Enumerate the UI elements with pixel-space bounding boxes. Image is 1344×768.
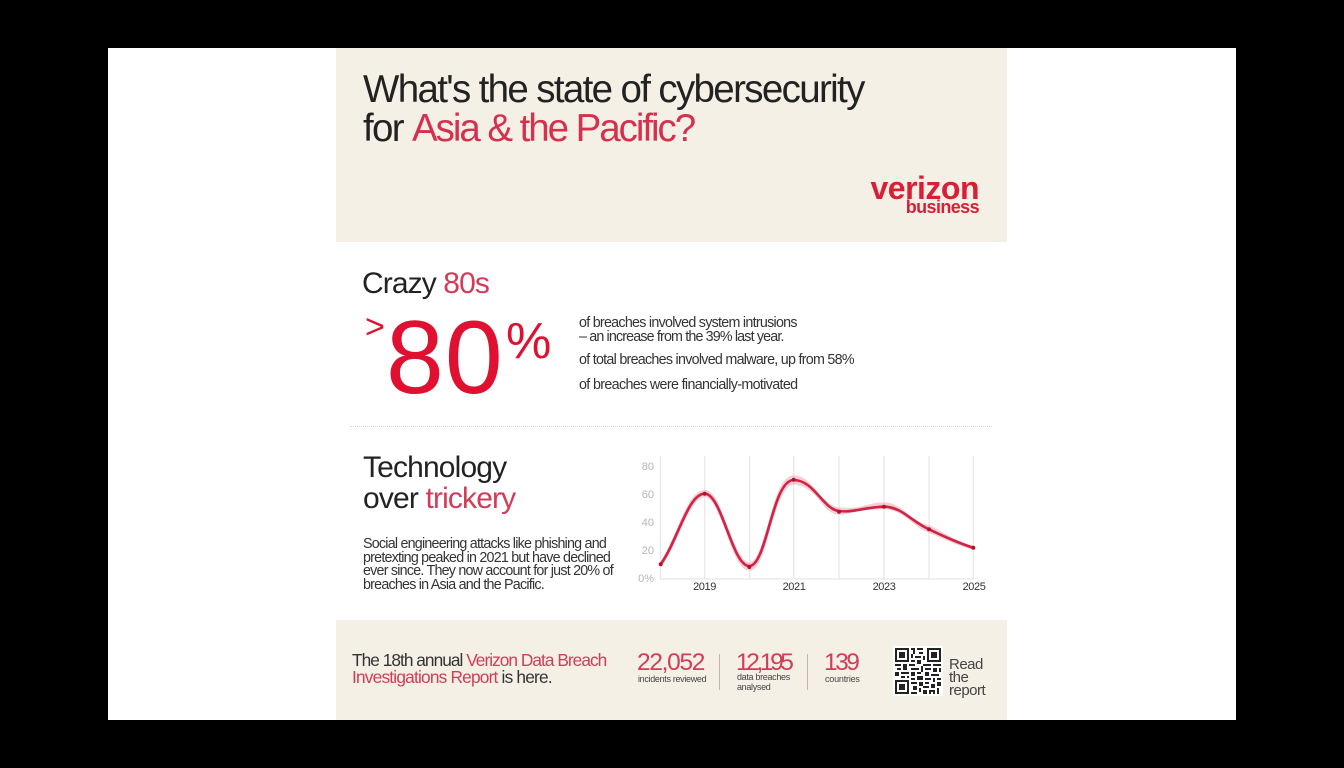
icon: QR code [893,646,943,696]
heading: crazy 80s: Crazy 80s [362,267,489,300]
y axis labels: 80 [642,461,654,473]
white page background [108,48,1236,720]
y axis labels: 40 [642,517,654,529]
stat: data breaches analysed: analysed [737,682,770,692]
title: What's the state of cybersecurity [363,68,864,111]
big stat: over 80 percent [365,300,551,416]
percent sign: % [506,312,551,369]
stat: data breaches analysed: 12,195 [736,649,791,676]
body text: social engineering: breaches in Asia and the Pacific. [363,577,544,593]
body text: social engineering [363,536,614,593]
call to action: read the report: Read [949,656,983,673]
body text: social engineering: ever since. They now account for just 20% of [363,563,613,579]
title [363,68,866,150]
report announcement: The 18th annual Verizon Data Breach [352,650,606,670]
data points [659,478,975,569]
title: for Asia & the Pacific? [363,106,694,150]
x axis labels: 2025 [963,581,986,593]
stat: incidents reviewed: incidents reviewed [638,674,706,684]
stat: incidents reviewed: 22,052 [637,649,704,676]
y axis labels: 0% [638,573,654,585]
line chart: social engineering share of breaches 2019 to 2025 [638,456,986,593]
statistic: system intrusions: – an increase from the 39% last year. [579,329,784,345]
y axis labels: 20 [642,545,654,557]
logo: verizon business: verizon [870,170,979,206]
x axis labels [693,581,986,593]
number 80: 80 [386,300,504,416]
stat: data breaches analysed [736,649,793,692]
panel: header [336,48,1007,242]
report announcement [352,650,606,687]
stat: data breaches analysed: data breaches [737,672,790,682]
statistic: system intrusions: of breaches involved system intrusions [579,315,797,331]
logo: verizon business: business [906,197,979,217]
body text: social engineering: pretexting peaked in 2021 but have declined [363,550,610,566]
heading: technology over trickery: Technology [363,451,506,484]
y axis labels: 60 [642,489,654,501]
x axis labels: 2023 [873,581,896,593]
greater-than sign: > [365,308,385,346]
statistic: system intrusions [579,315,797,345]
stat: countries: countries [825,674,860,684]
panel: technology over trickery [363,451,614,593]
panel: crazy 80s [362,267,854,416]
statistic: financially motivated: of breaches were financially-motivated [579,377,797,393]
stat: countries: 139 [824,649,857,676]
report announcement: Investigations Report is here. [352,667,552,687]
body text: social engineering: Social engineering attacks like phishing and [363,536,606,552]
call to action: read the report [949,656,986,699]
x axis labels: 2019 [693,581,716,593]
data line with soft band [661,477,973,569]
y axis labels [638,461,654,585]
heading: technology over trickery: over trickery [363,482,515,515]
statistic: malware: of total breaches involved malware, up from 58% [579,352,854,368]
call to action: read the report: report [949,682,985,699]
panel: footer [336,620,1007,720]
x axis labels: 2021 [783,581,806,593]
heading: technology over trickery [363,451,516,515]
call to action: read the report: the [949,669,968,686]
breach statistics list [579,315,854,393]
